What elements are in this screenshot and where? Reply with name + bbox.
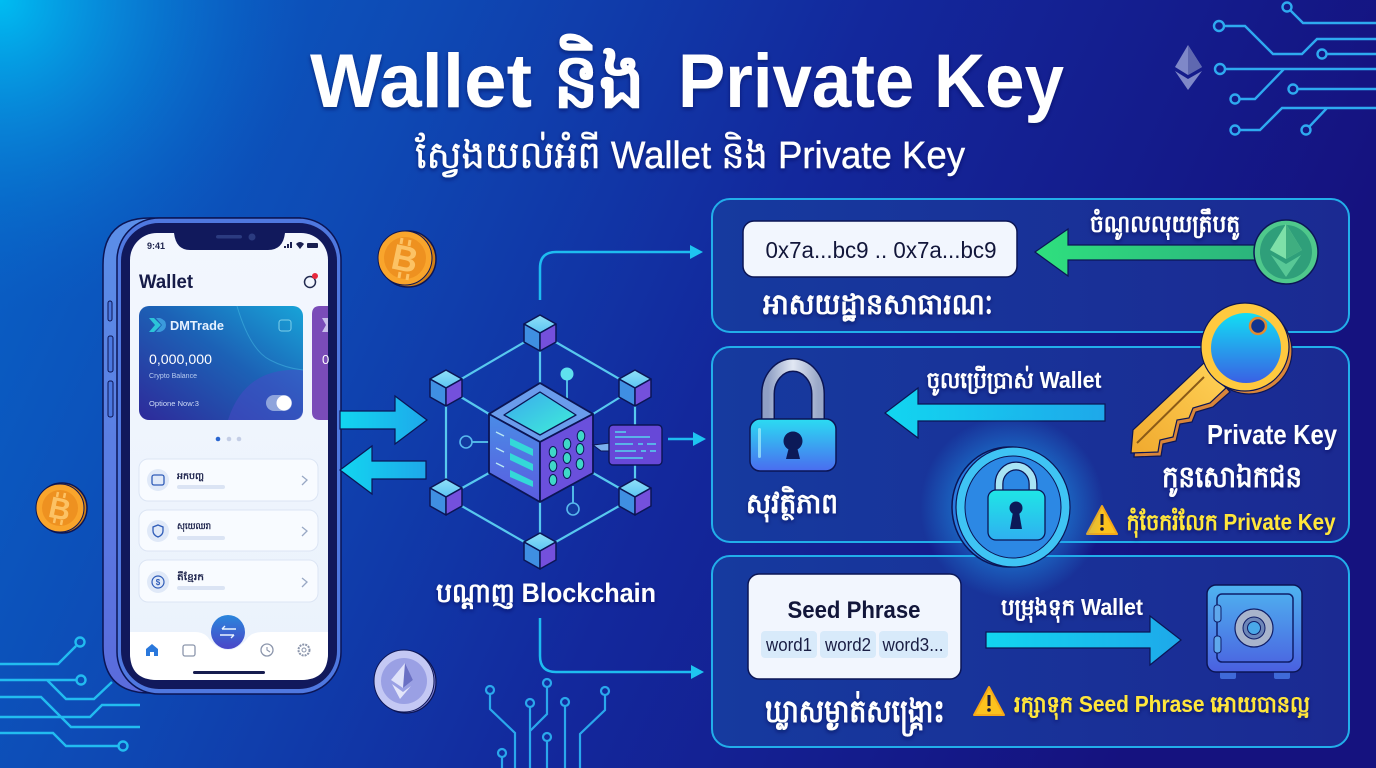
phone screen [130, 233, 328, 680]
icon: bitcoin coin left [36, 483, 87, 533]
circuit lines: bottom left [0, 638, 140, 750]
phone bezel [121, 223, 337, 689]
icon: padlock [750, 365, 836, 471]
icon: ethereum coin [374, 650, 436, 713]
title [310, 33, 1064, 124]
blockchain network diagram [430, 315, 662, 569]
menu row 3: $ [156, 578, 161, 587]
backup label: បម្រុងទុក Wallet [1001, 594, 1143, 623]
khmer private key label: កូនសោឯកជន [1162, 461, 1302, 498]
title: និង [553, 33, 645, 124]
central cube [489, 383, 593, 502]
node bottom [524, 533, 556, 569]
subtitle: ស្វែងយល់អំពី Wallet និង Private Key [415, 131, 965, 178]
icon: glowing lock coin [920, 415, 1104, 599]
arrow: green receive [1035, 229, 1260, 276]
warning: keep seed phrase safe: រក្សាទុក Seed Phrase អោយបានល្អ [1014, 691, 1310, 720]
menu row 2 [139, 510, 318, 551]
seed phrase card: word3... [882, 635, 944, 655]
public address label: អាសយដ្ឋានសាធារណៈ [763, 289, 993, 322]
carousel dots [216, 437, 241, 441]
node top [524, 315, 556, 351]
icon: bitcoin coin left: B [46, 491, 74, 528]
security label: សុវត្ថិភាព [746, 485, 838, 523]
title: Private Key [678, 39, 1064, 124]
phone back shell [103, 218, 300, 693]
side buttons [108, 301, 113, 417]
address box [743, 221, 1017, 277]
wallet card: Optione Now:3 [149, 399, 199, 408]
menu row 3 [139, 560, 318, 602]
warning: keep seed phrase safe [974, 687, 1310, 720]
access label: ចូលប្រើប្រាស់ Wallet [926, 365, 1102, 396]
connector: network to private key [668, 432, 706, 446]
seed phrase card: word1 [765, 635, 812, 655]
network label: បណ្ដាញ Blockchain [436, 578, 656, 610]
notch [174, 233, 285, 250]
node lower right [619, 479, 651, 515]
notification icon [304, 273, 318, 288]
arrow: access wallet [885, 388, 1105, 438]
warning: do not share [1087, 506, 1336, 538]
arrow: phone to network [340, 396, 427, 444]
arrow: backup [986, 616, 1181, 665]
title: Wallet [310, 39, 532, 124]
second card peek: 0 [322, 352, 329, 367]
circuit lines: top right [1214, 2, 1376, 134]
connector: network to seed phrase [540, 618, 704, 679]
seed phrase card: word2 [824, 635, 871, 655]
screen heading: Wallet [139, 272, 194, 293]
icon: safe [1207, 585, 1302, 679]
swap button [211, 615, 245, 649]
seed phrase card: Seed Phrase [788, 597, 920, 624]
menu row 2: សុយេឈរា [177, 521, 211, 533]
circuit lines: bottom centre [486, 679, 609, 768]
phone mockup [103, 218, 341, 694]
icon: bitcoin coin top [378, 231, 436, 287]
icon: ethereum logo top right [1175, 45, 1202, 90]
satellite dots [460, 368, 579, 515]
menu row 3: តឺខ្មែរក [177, 571, 204, 583]
wallet card: DMTrade [170, 318, 224, 333]
private key label: Private Key [1207, 419, 1337, 450]
menu row 1 [139, 459, 318, 501]
node upper left [430, 370, 462, 406]
wallet card: Crypto Balance [149, 373, 197, 380]
seed phrase card [748, 574, 961, 679]
panel: seed phrase [712, 556, 1349, 747]
wallet card [139, 306, 303, 420]
menu row 1: អកបញ្ហ [176, 471, 204, 482]
network links [446, 333, 635, 551]
address box: 0x7a...bc9 .. 0x7a...bc9 [766, 237, 996, 263]
warning: do not share: កុំចែករំលែក Private Key [1126, 507, 1336, 538]
seed phrase khmer label: ឃ្លាសម្ងាត់សង្គ្រោះ [765, 691, 945, 737]
wallet card: 0,000,000 [149, 352, 212, 367]
icon: golden key [1131, 303, 1292, 457]
phone front frame [117, 218, 341, 694]
node upper right [619, 370, 651, 406]
data chat bubble [593, 425, 662, 465]
connector: network to public address [540, 245, 703, 300]
panel: public address [712, 199, 1349, 332]
icon: bitcoin coin top: B [388, 236, 422, 281]
second card peek [312, 306, 329, 420]
arrow: network to phone [340, 446, 426, 494]
icon: green ethereum coin [1254, 220, 1318, 284]
panel: private key [712, 347, 1349, 542]
node lower left [430, 479, 462, 515]
bottom navigation [130, 632, 328, 680]
receive label: ចំណូលលុយត្រឹបតូ [1090, 208, 1240, 241]
status bar: 9:41 [147, 241, 165, 251]
